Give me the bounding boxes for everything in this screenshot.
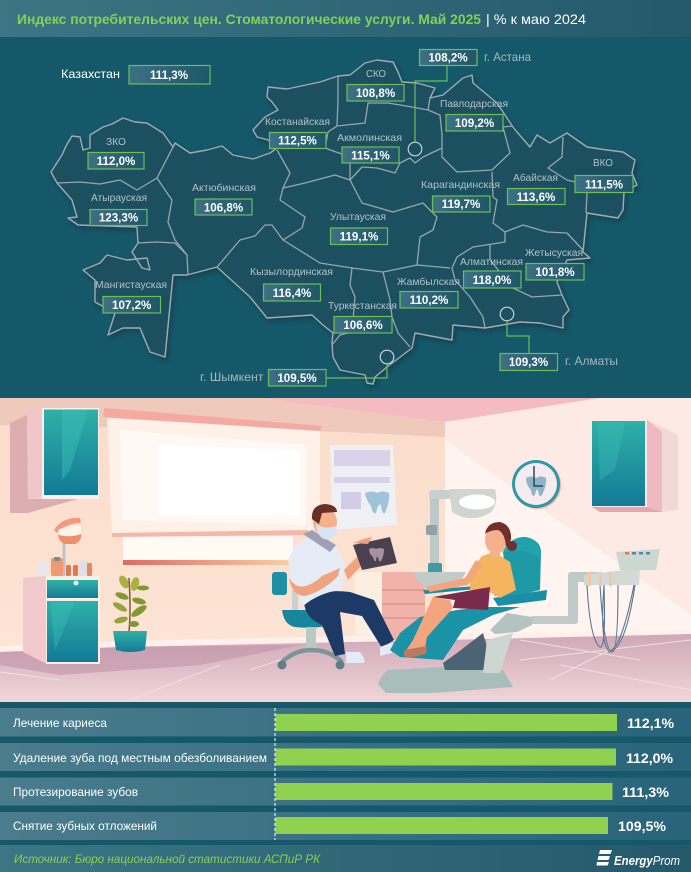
- region: Павлодарская: 109,2%: [455, 117, 494, 130]
- region: Атырауская: Атырауская: [91, 192, 147, 204]
- city: Шымкент: [200, 350, 394, 386]
- national value: Kazakhstan: Казахстан: [61, 67, 120, 81]
- region: Улытауская: [330, 211, 388, 244]
- region: Акмолинская: [337, 132, 402, 163]
- back cabinet: [355, 572, 425, 640]
- region: Кызылординская: 116,4%: [273, 287, 311, 300]
- region: Мангистауская: Мангистауская: [95, 279, 167, 291]
- region: Атырауская: 123,3%: [99, 212, 138, 224]
- region: Акмолинская: 115,1%: [351, 150, 390, 162]
- region: Карагандинская: 119,7%: [442, 198, 480, 211]
- region: ЗКО: ЗКО: [106, 136, 126, 148]
- illustration: dental office: [0, 398, 691, 702]
- region: Абайская: [508, 172, 565, 204]
- region: Костанайская: 112,5%: [278, 134, 317, 148]
- row: Снятие зубных отложений: 109,5%: [618, 819, 666, 834]
- source note: Источник: Бюро национальной статистики АСПиР РК: [14, 852, 321, 866]
- region: Улытауская: 119,1%: [340, 230, 378, 244]
- region: Карагандинская: [421, 179, 500, 212]
- ceiling: [262, 398, 600, 422]
- region: Мангистауская: [95, 279, 167, 313]
- title: Индекс потребительских цен. Стоматологические услуги. Май 2025: [17, 11, 481, 27]
- right wall: [445, 398, 691, 640]
- patient chair: [378, 537, 547, 693]
- dentist: [288, 504, 397, 663]
- national value: Kazakhstan: 111,3%: [150, 69, 188, 82]
- region: Карагандинская: Карагандинская: [421, 179, 500, 191]
- region: Алматинская: Алматинская: [460, 256, 523, 268]
- dentist chair stool: [272, 572, 344, 670]
- city: Шымкент: 109,5%: [277, 372, 317, 385]
- region: Жетысуская: 101,8%: [535, 266, 575, 279]
- patient: [404, 522, 517, 658]
- row: Удаление зуба: Удаление зуба под местным обезболиванием: [13, 751, 267, 765]
- row: Лечение кариеса: Лечение кариеса: [13, 716, 107, 730]
- dental lamp and basin: [413, 489, 496, 588]
- bar chart: stomatological services: [0, 708, 691, 840]
- row: Удаление зуба: [0, 743, 691, 771]
- region: Жамбылская: 110,2%: [410, 294, 448, 307]
- floor: [0, 630, 691, 702]
- city: Алматы: [500, 307, 618, 370]
- region: Туркестанская: Туркестанская: [328, 300, 397, 312]
- row: Лечение кариеса: [0, 708, 691, 736]
- region: СКО: СКО: [366, 68, 386, 80]
- row: Протезирование зубов: [0, 778, 691, 806]
- potted plant: [112, 574, 149, 652]
- region: Акмолинская: Акмолинская: [337, 132, 402, 144]
- city: Алматы: г. Алматы: [565, 354, 618, 368]
- region: Абайская: Абайская: [513, 172, 558, 184]
- region: Жетысуская: [525, 247, 584, 280]
- region: СКО: [347, 68, 404, 101]
- row: Удаление зуба: 112,0%: [626, 751, 673, 766]
- region: СКО: 108,8%: [356, 87, 395, 100]
- region: Туркестанская: 106,6%: [343, 319, 383, 332]
- wall clock: [512, 460, 561, 509]
- city: Астана: [408, 50, 531, 156]
- subtitle: | % к маю 2024: [486, 11, 586, 27]
- region: Атырауская: [90, 192, 147, 226]
- left wall: [0, 398, 445, 655]
- map of Kazakhstan regions: [51, 60, 637, 384]
- national value: Kazakhstan: [61, 66, 210, 84]
- lower cabinet: [23, 576, 100, 664]
- region: Жамбылская: Жамбылская: [397, 276, 460, 288]
- row: Протезирование зубов: 111,3%: [622, 785, 669, 800]
- region: Туркестанская: [328, 300, 397, 333]
- region: Актюбинская: 106,8%: [204, 202, 243, 214]
- region: Улытауская: Улытауская: [330, 211, 386, 223]
- jaw model and bottles: [37, 518, 92, 576]
- instrument tray and cables: [532, 549, 660, 652]
- region: Актюбинская: Актюбинская: [192, 182, 256, 194]
- region: Абайская: 113,6%: [517, 191, 555, 204]
- row: Снятие зубных отложений: Снятие зубных отложений: [13, 819, 157, 833]
- region: Алматинская: [460, 256, 523, 288]
- region: Актюбинская: [192, 182, 256, 215]
- row: Протезирование зубов: Протезирование зубов: [13, 785, 138, 799]
- row: Снятие зубных отложений: [0, 812, 691, 840]
- region: Костанайская: [265, 116, 330, 148]
- row: Лечение кариеса: 112,1%: [627, 716, 674, 731]
- region: Костанайская: Костанайская: [265, 116, 330, 128]
- region: ЗКО: 112,0%: [97, 155, 135, 168]
- region: Кызылординская: [250, 266, 333, 301]
- region: Мангистауская: 107,2%: [112, 299, 151, 312]
- left wall cabinet: [10, 408, 99, 513]
- city: Алматы: 109,3%: [509, 356, 548, 369]
- footer band: [0, 845, 691, 872]
- region: ЗКО: [88, 136, 144, 169]
- city: Шымкент: г. Шымкент: [200, 370, 264, 384]
- city: Астана: 108,2%: [428, 52, 468, 64]
- region: Жамбылская: [397, 276, 460, 308]
- region: ВКО: 111,5%: [585, 178, 623, 192]
- window with blind: [103, 408, 322, 565]
- region: Жетысуская: Жетысуская: [525, 247, 583, 259]
- logo: EnergyProm: [596, 850, 680, 868]
- right wall cabinet: [592, 420, 678, 512]
- region: Алматинская: 118,0%: [473, 274, 511, 287]
- region: ВКО: [575, 157, 633, 192]
- region: Павлодарская: Павлодарская: [440, 98, 508, 110]
- city: Астана: г. Астана: [484, 50, 531, 64]
- region: Кызылординская: Кызылординская: [250, 266, 333, 278]
- header band: [0, 0, 691, 37]
- region: Павлодарская: [440, 98, 508, 131]
- poster with tooth: [330, 445, 397, 530]
- logo: EnergyProm: EnergyProm: [614, 853, 680, 868]
- region: ВКО: ВКО: [593, 157, 613, 169]
